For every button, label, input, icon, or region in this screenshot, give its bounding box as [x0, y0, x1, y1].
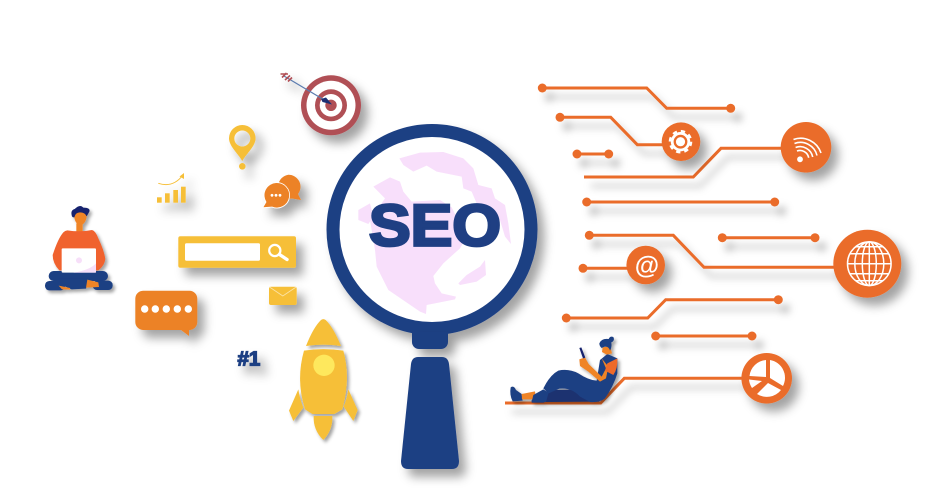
world map: [358, 152, 511, 314]
hair: [599, 337, 614, 351]
line 9: [562, 295, 783, 322]
front bubble: [263, 183, 290, 208]
target with arrow: [280, 73, 361, 135]
at sign icon: [626, 246, 665, 284]
neck and head: [74, 212, 87, 232]
crossed legs: [45, 271, 113, 290]
rocket body: [300, 349, 347, 414]
globe icon: [833, 230, 901, 298]
rocket flame: [314, 416, 332, 440]
bar background: [178, 236, 296, 268]
person with phone: [510, 337, 617, 403]
gear icon: [662, 122, 700, 161]
hair: [71, 206, 90, 217]
magnifying glass: [333, 130, 531, 469]
neck: [412, 332, 448, 349]
trend arrow: [158, 173, 184, 185]
line 1: [538, 84, 735, 113]
lens: [333, 130, 531, 328]
arm: [579, 357, 608, 382]
bars: [157, 187, 186, 203]
target rings: [301, 75, 361, 135]
pie chart icon: [741, 353, 792, 404]
search bar: [178, 236, 296, 268]
location pin: [229, 125, 256, 170]
growth bar chart icon: [157, 173, 186, 203]
envelope icon: [269, 287, 297, 305]
west island: [358, 203, 373, 224]
circuit lines: [505, 84, 838, 403]
gear glyph: [670, 131, 691, 152]
front boot: [532, 389, 549, 402]
bubble body: [135, 291, 197, 336]
pie slices: [749, 360, 785, 397]
input field: [185, 243, 260, 261]
line 10: [651, 332, 756, 340]
line 3: [572, 150, 613, 158]
rocket: [289, 319, 358, 440]
line 8: [578, 264, 630, 273]
rocket nose: [306, 319, 341, 346]
handle: [401, 357, 459, 469]
line 6: [585, 231, 838, 267]
line 7: [718, 233, 820, 242]
SEO title: SEO: [369, 193, 501, 258]
at badge: [626, 246, 665, 284]
back bubble: [278, 175, 301, 200]
speech bubble: [135, 291, 197, 336]
wifi glyph: [794, 138, 821, 162]
rocket fins: [289, 389, 358, 421]
line 11: [505, 378, 745, 403]
phone: [579, 347, 585, 358]
chat bubbles icon: [263, 175, 301, 208]
sleeve: [605, 358, 617, 375]
search icon: [269, 245, 287, 260]
laptop: [62, 248, 96, 273]
near leg and torso: [543, 354, 617, 402]
east island: [458, 260, 486, 285]
continent main: [370, 177, 467, 314]
far leg: [532, 389, 600, 403]
globe badge: [833, 230, 901, 298]
rank label: #1: [238, 348, 260, 370]
pie badge: [741, 353, 792, 404]
person with laptop: [45, 206, 113, 290]
arrow: [280, 73, 332, 104]
gear badge: [662, 122, 700, 161]
continent north: [399, 152, 511, 244]
line 4: [584, 148, 785, 177]
back boot: [510, 387, 523, 401]
globe glyph: [848, 242, 891, 286]
bubble dots: [141, 305, 192, 313]
ankle: [522, 391, 536, 399]
face: [602, 346, 612, 355]
rocket window: [313, 355, 335, 376]
line 2: [556, 113, 665, 145]
wifi badge: [781, 122, 831, 173]
line 5: [582, 198, 779, 206]
foot: [59, 280, 99, 290]
wifi icon: [781, 122, 831, 173]
at glyph: @: [635, 252, 659, 280]
sweater: [53, 230, 105, 270]
